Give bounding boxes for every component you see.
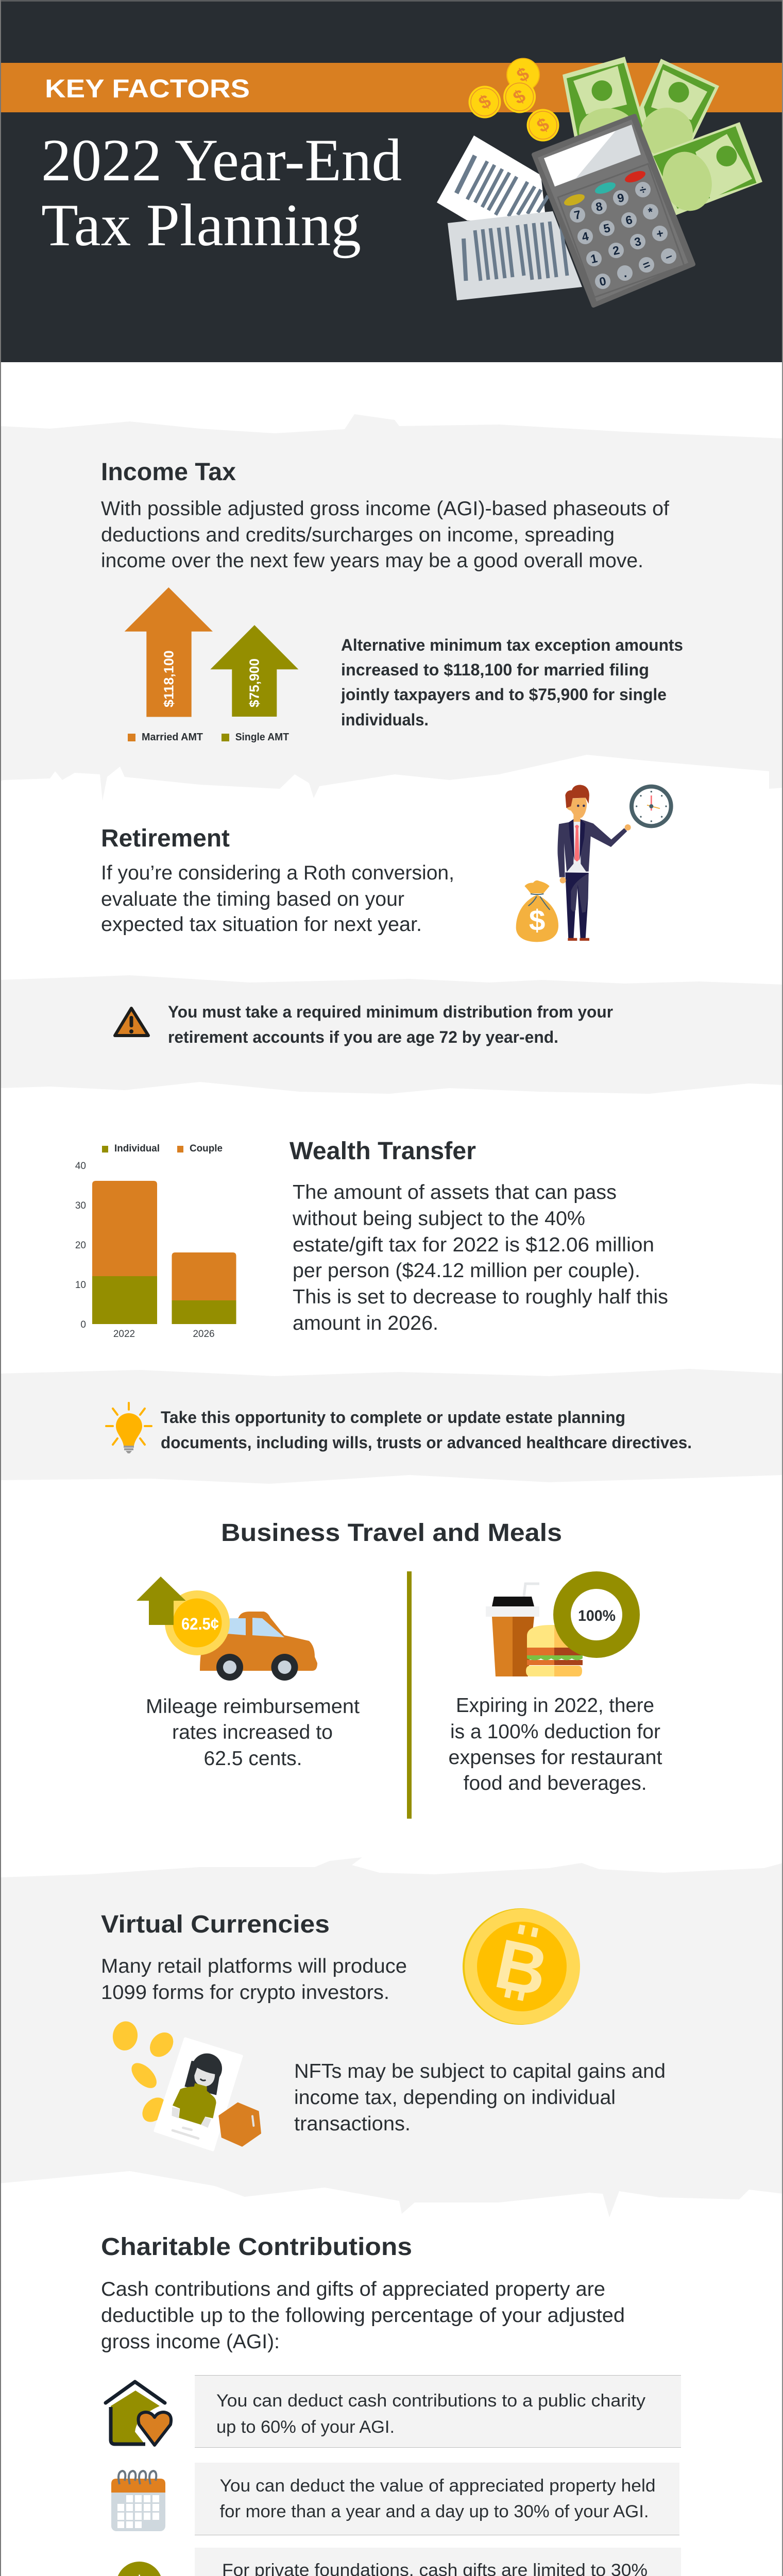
legend: individual and couple: Couple <box>190 1143 223 1154</box>
legend: individual and couple: Individual <box>114 1143 160 1154</box>
text: alternative minimum tax: increased to $118,100 for married filing <box>341 660 649 679</box>
icon: house with heart <box>106 2382 171 2445</box>
text: crypto forms: Many retail platforms will produce <box>101 1955 407 1977</box>
text: wealth transfer body <box>292 1181 668 1334</box>
heading: retirement: Retirement <box>101 825 230 852</box>
text: income tax body <box>101 498 669 572</box>
icon: car with mileage coin: 62.5¢ <box>181 1615 219 1633</box>
text: required minimum distribution <box>168 1003 613 1046</box>
legend: individual and couple <box>102 1143 223 1154</box>
panel: income tax background <box>0 414 783 801</box>
y axis labels: 10 <box>75 1280 86 1291</box>
text: wealth transfer body: The amount of assets that can pass <box>293 1181 617 1204</box>
panel: appreciated property: You can deduct the value of appreciated property held <box>219 2476 655 2496</box>
text: meals deduction: expenses for restaurant <box>448 1747 662 1769</box>
heading: wealth transfer: Wealth Transfer <box>290 1138 476 1165</box>
text: estate planning tip: documents, including wills, trusts or advanced healthcare directives. <box>161 1433 692 1452</box>
icon: money bag <box>516 880 558 942</box>
text: income tax body: With possible adjusted gross income (AGI)-based phaseouts of <box>101 498 669 520</box>
icon: receipts <box>437 135 582 300</box>
legend: AMT: Married AMT <box>142 732 203 743</box>
icon: coins <box>469 59 559 141</box>
text: alternative minimum tax: individuals. <box>341 710 429 729</box>
icon: calculator: 9 <box>616 191 625 205</box>
icon: money bag: $ <box>529 905 545 937</box>
text: estate planning tip: Take this opportunity to complete or update estate planning <box>161 1408 625 1427</box>
text: charitable intro: deductible up to the following percentage of your adjusted <box>101 2304 625 2327</box>
text: mileage: rates increased to <box>172 1721 333 1743</box>
y axis labels: 30 <box>75 1200 86 1211</box>
arrow: married AMT <box>125 587 213 717</box>
panel: public charity: You can deduct cash contributions to a public charity <box>216 2391 645 2411</box>
text: alternative minimum tax: Alternative minimum tax exception amounts <box>341 636 683 654</box>
text: wealth transfer body: per person ($24.12 million per couple). <box>293 1260 640 1282</box>
text: mileage: 62.5 cents. <box>204 1748 302 1770</box>
text: estate planning tip <box>161 1408 692 1452</box>
title: 2022 Year-End <box>41 127 402 194</box>
icon: calculator: = <box>641 257 652 273</box>
icon: calculator: + <box>655 226 665 241</box>
icon: calculator: 7 <box>573 208 582 222</box>
text: meals deduction <box>448 1694 662 1794</box>
heading: business travel and meals: Business Travel and Meals <box>221 1519 562 1547</box>
label: key factors: KEY FACTORS <box>45 74 250 103</box>
text: mileage <box>146 1696 360 1770</box>
icon: coins: $ <box>475 90 495 113</box>
icon: calculator <box>534 116 693 306</box>
text: crypto forms <box>101 1955 407 2004</box>
icon: calculator: 8 <box>594 199 604 214</box>
panel: private foundations <box>195 2548 681 2576</box>
icon: car with mileage coin <box>137 1577 317 1681</box>
text: retirement body: expected tax situation for next year. <box>101 913 422 936</box>
text: NFT: NFTs may be subject to capital gains and <box>294 2060 666 2082</box>
icon: businessman with clock and money bag <box>516 785 671 942</box>
text: income tax body: income over the next few years may be a good overall move. <box>101 550 643 572</box>
icon: food and drink with 100% ring <box>486 1580 631 1676</box>
bar: 2022 <box>92 1181 157 1340</box>
y axis labels: 0 <box>80 1319 86 1330</box>
text: wealth transfer body: estate/gift tax for 2022 is $12.06 million <box>293 1234 654 1256</box>
arrow: single AMT <box>210 625 298 717</box>
panel: estate planning callout background <box>0 1369 783 1484</box>
bar: 2026: 2026 <box>193 1329 215 1340</box>
icon: banknotes <box>563 57 762 216</box>
text: required minimum distribution: retirement accounts if you are age 72 by year-end. <box>168 1028 558 1046</box>
text: mileage: Mileage reimbursement <box>146 1696 360 1718</box>
title: Tax Planning <box>41 192 361 259</box>
text: charitable intro: Cash contributions and gifts of appreciated property are <box>101 2278 605 2300</box>
text: income tax body: deductions and credits/surcharges on income, spreading <box>101 524 615 546</box>
icon: coins: $ <box>509 85 529 108</box>
text: meals deduction: Expiring in 2022, there <box>456 1694 654 1717</box>
panel: virtual currencies background <box>0 1857 783 2217</box>
icon: calculator: 6 <box>624 213 634 227</box>
icon: calendar <box>111 2471 165 2531</box>
text: wealth transfer body: This is set to decrease to roughly half this <box>293 1286 668 1308</box>
icon: calculator: 2 <box>611 243 621 258</box>
text: charitable intro: gross income (AGI): <box>101 2331 280 2353</box>
icon: bitcoin <box>463 1908 580 2025</box>
header panel <box>0 0 783 362</box>
panel: RMD callout background <box>0 975 783 1094</box>
text: crypto forms: 1099 forms for crypto investors. <box>101 1981 389 2004</box>
icon: light bulb <box>106 1403 151 1453</box>
text: NFT <box>294 2060 666 2135</box>
icon: clock <box>632 787 671 826</box>
y axis labels <box>75 1161 86 1330</box>
text: retirement body <box>101 862 454 936</box>
icon: food and drink with 100% ring: 100% <box>578 1607 616 1624</box>
text: alternative minimum tax <box>341 636 683 729</box>
icon: calculator: . <box>622 266 628 280</box>
icon: calculator: – <box>663 248 674 263</box>
panel: public charity: up to 60% of your AGI. <box>216 2417 395 2437</box>
y axis labels: 20 <box>75 1240 86 1251</box>
icon: coins: $ <box>513 63 533 86</box>
y axis labels: 40 <box>75 1161 86 1172</box>
icon: calculator, cash and receipts illustration <box>437 57 762 306</box>
text: retirement body: If you’re considering a Roth conversion, <box>101 862 454 884</box>
icon: warning <box>115 1008 148 1036</box>
heading: income tax: Income Tax <box>101 459 236 486</box>
text: retirement body: evaluate the timing based on your <box>101 888 404 910</box>
text: required minimum distribution: You must take a required minimum distribution from your <box>168 1003 613 1021</box>
icon: calculator: 5 <box>602 221 611 235</box>
panel: appreciated property: for more than a year and a day up to 30% of your AGI. <box>219 2502 649 2521</box>
text: alternative minimum tax: jointly taxpayers and to $75,900 for single <box>341 685 667 704</box>
legend: AMT: Single AMT <box>235 732 289 743</box>
chart: AMT arrows <box>125 587 298 743</box>
panel: appreciated property <box>195 2463 679 2535</box>
icon: coins: $ <box>533 113 553 137</box>
chart: wealth transfer stacked bars <box>75 1143 236 1340</box>
title <box>41 127 402 259</box>
panel: public charity <box>195 2375 681 2448</box>
icon: calculator: 4 <box>581 229 590 244</box>
icon: NFT card with coins <box>111 2020 261 2150</box>
text: wealth transfer body: amount in 2026. <box>293 1312 438 1334</box>
bar: 2026 <box>172 1252 236 1340</box>
icon: calculator: 0 <box>598 274 607 289</box>
icon: calculator: 3 <box>633 234 642 249</box>
arrow: single AMT: $75,900 <box>247 658 262 707</box>
bar: 2022: 2022 <box>113 1329 135 1340</box>
arrow: married AMT: $118,100 <box>161 650 177 707</box>
icon: calculator: * <box>647 205 654 219</box>
heading: charitable contributions: Charitable Contributions <box>101 2233 412 2261</box>
icon: calculator: 1 <box>589 251 599 266</box>
text: meals deduction: is a 100% deduction for <box>450 1721 660 1743</box>
text: NFT: transactions. <box>294 2113 411 2135</box>
icon: calculator: ÷ <box>638 182 648 197</box>
text: wealth transfer body: without being subject to the 40% <box>292 1208 585 1230</box>
icon: hands with dollar coin <box>103 2562 177 2576</box>
divider: business travel <box>407 1571 412 1819</box>
text: meals deduction: food and beverages. <box>464 1772 647 1794</box>
text: charitable intro <box>101 2278 625 2353</box>
legend: AMT <box>128 732 289 743</box>
text: NFT: income tax, depending on individual <box>294 2087 616 2109</box>
icon: bitcoin: B <box>489 1924 554 2011</box>
icon: man <box>557 785 631 941</box>
heading: virtual currencies: Virtual Currencies <box>101 1911 330 1938</box>
